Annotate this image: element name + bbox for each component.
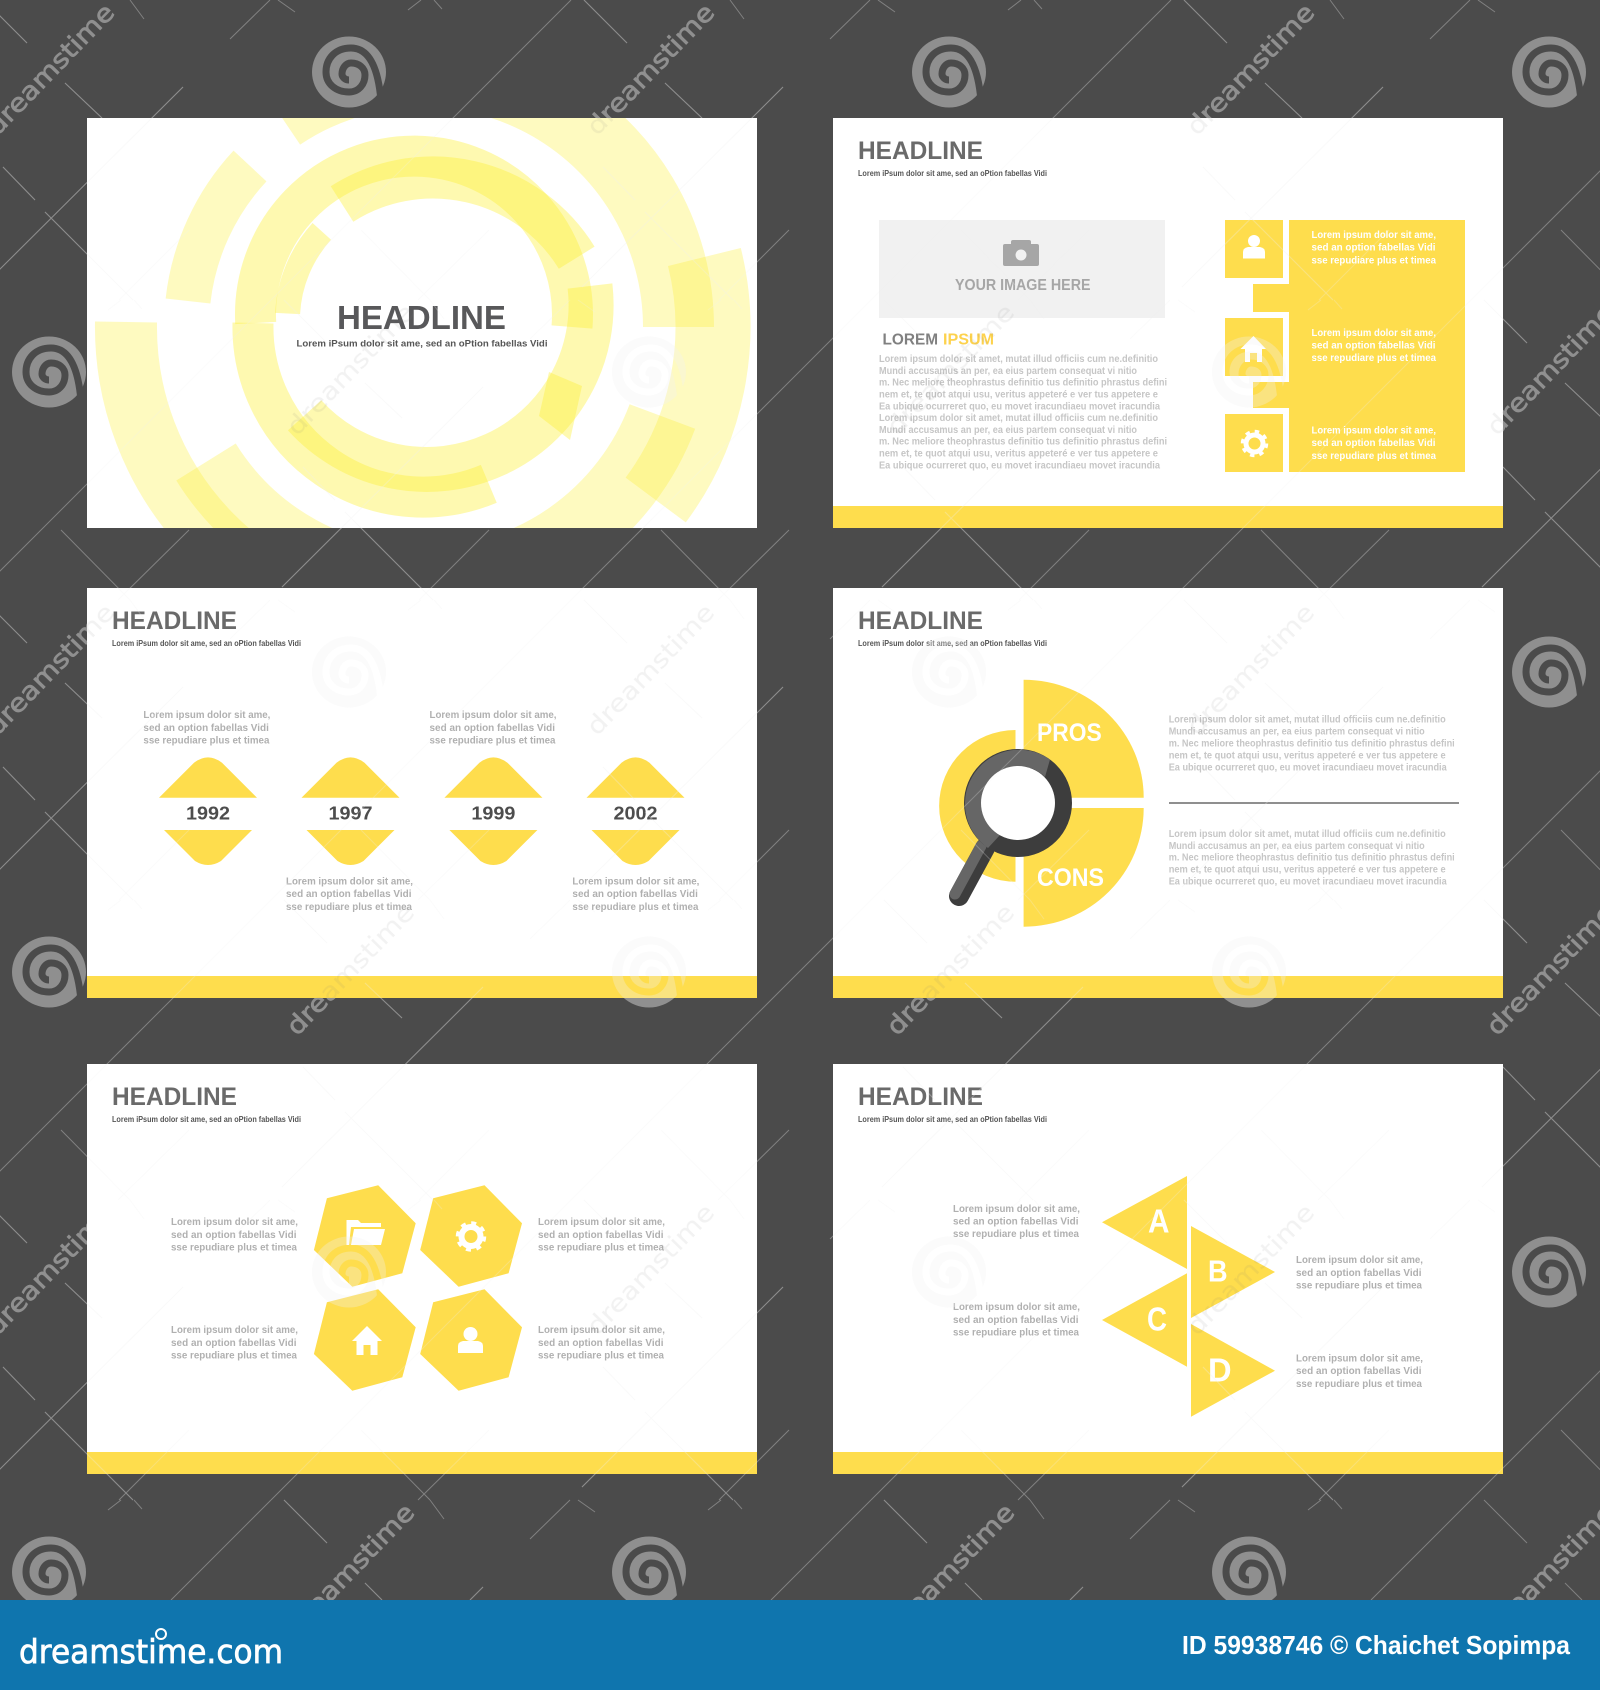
callout text 3: sse repudiare plus et timea [1312,450,1436,462]
text: top right: Lorem ipsum dolor sit ame, [538,1216,665,1228]
text: 1997: sse repudiare plus et timea [286,901,412,913]
watermark overlay on panels: dreamstime [1181,0,1320,141]
footer logo: dreamstime.com [19,1632,283,1671]
text: top left: Lorem ipsum dolor sit ame, [171,1216,298,1228]
text: bottom right: Lorem ipsum dolor sit ame, [538,1324,665,1336]
text: A: Lorem ipsum dolor sit ame, [953,1203,1080,1215]
text: top left: sse repudiare plus et timea [171,1241,297,1253]
label: cons: CONS [1037,864,1104,892]
watermark overlay on panels: dreamstime [881,298,1020,441]
icon: camera [1003,240,1039,266]
pros text [1169,714,1455,774]
text: D [1296,1352,1423,1390]
text: 1999: sse repudiare plus et timea [430,735,556,747]
background watermark pattern: dreamstime [581,0,720,141]
text: C: sed an option fabellas Vidi [953,1314,1079,1326]
pros text: Lorem ipsum dolor sit amet, mutat illud officiis cum ne.definitio [1169,714,1446,726]
pros text: Mundi accusamus an per, ea eius partem consequat vi nitio [1169,726,1425,738]
subheading: Lorem iPsum dolor sit ame, sed an oPtion fabellas Vidi [858,638,1047,648]
title subheading: Lorem iPsum dolor sit ame, sed an oPtion fabellas Vidi [296,338,548,350]
subheading: Lorem iPsum dolor sit ame, sed an oPtion fabellas Vidi [858,1114,1047,1124]
text: bottom left: sed an option fabellas Vidi [171,1337,297,1349]
text: D: sse repudiare plus et timea [1296,1378,1422,1390]
body text: Ea ubique ocurreret quo, eu movet iracundiaeu movet iracundia [879,401,1160,412]
headline: HEADLINE [858,607,983,635]
subheading: lorem ipsum [882,332,994,348]
yellow text column [1253,220,1465,472]
triangle B [1191,1226,1275,1318]
text: 1997 [286,876,413,913]
watermark overlay on panels [87,118,1503,1474]
icon box: gear [1225,414,1283,472]
placeholder label: YOUR IMAGE HERE [955,277,1091,294]
subheading: lorem ipsum: IPSUM [943,332,994,348]
triangle C [1102,1273,1187,1367]
icon box: house [1225,318,1283,376]
divider line [1169,802,1459,804]
body text: m. Nec meliore theophrastus definitio tus definitio phrastus defini [879,437,1167,448]
watermark overlay on panels: dreamstime [581,598,720,741]
text: 1997: Lorem ipsum dolor sit ame, [286,876,413,888]
callout text 1: sse repudiare plus et timea [1312,254,1436,266]
chart: overlapping yellow ring segments [95,118,750,528]
background watermark pattern: dreamstime [281,898,420,1041]
pros text: Ea ubique ocurreret quo, eu movet iracundiaeu movet iracundia [1169,762,1447,774]
triangle A [1102,1176,1187,1269]
watermark overlay on panels: dreamstime [581,0,720,141]
text: D: Lorem ipsum dolor sit ame, [1296,1352,1423,1364]
footer bar [833,1452,1503,1474]
text: top right [538,1216,665,1254]
cons text: nem et, te quot atqui usu, veritus appeteré e ver tus appetere e [1169,864,1446,875]
subheading: Lorem iPsum dolor sit ame, sed an oPtion fabellas Vidi [858,168,1047,178]
text: 1997: sed an option fabellas Vidi [286,888,412,900]
footer band [0,1600,1600,1690]
callout text 1 [1312,229,1436,266]
left half circle [939,730,1016,882]
cons text: m. Nec meliore theophrastus definitio tus definitio phrastus defini [1169,852,1455,864]
subheading: Lorem iPsum dolor sit ame, sed an oPtion fabellas Vidi [112,638,301,648]
marker: 1999 [444,757,542,865]
marker: 1997 [302,757,400,865]
callout text 3: Lorem ipsum dolor sit ame, [1312,424,1436,436]
icon: magnifying glass [955,749,1072,896]
body text: Mundi accusamus an per, ea eius partem consequat vi nitio [879,366,1137,377]
triangle D: D [1208,1352,1232,1389]
cons text [1169,829,1455,887]
text: D: sed an option fabellas Vidi [1296,1365,1422,1377]
subheading: lorem ipsum: LOREM [882,332,938,348]
text: bottom right: sse repudiare plus et timea [538,1349,664,1361]
body text: Lorem ipsum dolor sit amet, mutat illud officiis cum ne.definitio [879,413,1158,424]
panel: timeline [87,588,757,998]
text: C: sse repudiare plus et timea [953,1326,1079,1338]
cons text: Lorem ipsum dolor sit amet, mutat illud officiis cum ne.definitio [1169,829,1446,840]
text: bottom left [171,1324,298,1362]
text: top right: sed an option fabellas Vidi [538,1229,664,1241]
text: B [1296,1254,1423,1292]
callout text 2: sse repudiare plus et timea [1312,352,1436,364]
body text [879,354,1167,471]
body text: Mundi accusamus an per, ea eius partem consequat vi nitio [879,425,1137,436]
footer bar [87,1452,757,1474]
hexagon: folder [314,1185,416,1287]
marker: 1992: 1992 [186,802,230,824]
callout text 3 [1312,424,1436,462]
cons text: Mundi accusamus an per, ea eius partem consequat vi nitio [1169,841,1425,852]
cons quarter circle [1024,808,1144,927]
callout text 1: Lorem ipsum dolor sit ame, [1312,229,1436,241]
footer credit: ID 59938746 © Chaichet Sopimpa [1182,1630,1571,1660]
text: 1999 [430,709,557,746]
footer bar [833,976,1503,998]
text: A: sed an option fabellas Vidi [953,1216,1079,1228]
text: 1999: Lorem ipsum dolor sit ame, [430,709,557,721]
watermark overlay on panels: dreamstime [1181,1198,1320,1341]
callout text 1: sed an option fabellas Vidi [1312,242,1436,254]
footer bar [833,506,1503,528]
marker: 1992 [159,757,257,865]
text: 1992 [143,709,270,746]
text: bottom left: Lorem ipsum dolor sit ame, [171,1324,298,1336]
subheading: Lorem iPsum dolor sit ame, sed an oPtion fabellas Vidi [112,1114,301,1124]
text: 2002: sse repudiare plus et timea [572,901,699,913]
cons text: Ea ubique ocurreret quo, eu movet iracundiaeu movet iracundia [1169,876,1447,887]
body text: Ea ubique ocurreret quo, eu movet iracundiaeu movet iracundia [879,460,1160,471]
headline: HEADLINE [112,607,237,635]
marker: 2002 [586,757,684,865]
body text: nem et, te quot atqui usu, veritus appeteré e ver tus appetere e [879,449,1158,460]
panel: title slide with rings [87,118,757,528]
panel: triangles [833,1064,1503,1474]
watermark overlay on panels: dreamstime [881,898,1020,1041]
marker: 2002: 2002 [614,802,658,824]
text: top left [171,1216,298,1254]
triangle B: B [1208,1254,1228,1289]
watermark overlay on panels: dreamstime [281,298,420,441]
body text: nem et, te quot atqui usu, veritus appeteré e ver tus appetere e [879,390,1158,401]
image placeholder [879,220,1165,318]
hexagon: house [314,1289,416,1391]
text: 2002: Lorem ipsum dolor sit ame, [572,876,699,888]
text: 1992: Lorem ipsum dolor sit ame, [143,709,270,721]
headline: HEADLINE [112,1083,237,1111]
text: 1992: sed an option fabellas Vidi [143,722,269,734]
text: C: Lorem ipsum dolor sit ame, [953,1301,1080,1313]
headline: HEADLINE [858,1083,983,1111]
triangle C: C [1147,1301,1167,1338]
background watermark pattern: dreamstime [881,898,1020,1041]
pros text: m. Nec meliore theophrastus definitio tus definitio phrastus defini [1169,738,1455,750]
text: 2002: sed an option fabellas Vidi [572,888,698,900]
text: 2002 [572,876,699,913]
background watermark pattern: dreamstime [281,1498,420,1641]
panel: image and icon list [833,118,1503,528]
marker: 1997: 1997 [328,802,372,824]
background watermark pattern: dreamstime [881,1498,1020,1641]
text: top right: sse repudiare plus et timea [538,1241,664,1253]
text: A: sse repudiare plus et timea [953,1228,1079,1240]
watermark overlay on panels: dreamstime [1181,598,1320,741]
text: B: sed an option fabellas Vidi [1296,1267,1422,1279]
callout text 3: sed an option fabellas Vidi [1312,437,1436,449]
title headline: HEADLINE [337,299,506,336]
callout text 2: sed an option fabellas Vidi [1312,339,1436,351]
body text: Lorem ipsum dolor sit amet, mutat illud officiis cum ne.definitio [879,354,1158,365]
hexagon: person [420,1289,522,1391]
headline: HEADLINE [858,137,983,165]
pros quarter circle [1024,680,1144,798]
text: C [953,1301,1080,1338]
text: A [953,1203,1080,1240]
marker: 1999: 1999 [471,802,515,824]
text: 1999: sed an option fabellas Vidi [430,722,555,734]
text: B: sse repudiare plus et timea [1296,1279,1422,1291]
watermark overlay on panels: dreamstime [281,898,420,1041]
text: bottom right: sed an option fabellas Vidi [538,1337,664,1349]
text: B: Lorem ipsum dolor sit ame, [1296,1254,1423,1266]
text: bottom left: sse repudiare plus et timea [171,1349,297,1361]
callout text 2: Lorem ipsum dolor sit ame, [1312,327,1436,339]
panel: hexagons [87,1064,757,1474]
callout text 2 [1312,327,1436,364]
triangle D [1191,1324,1275,1417]
watermark overlay on panels: dreamstime [581,1198,720,1341]
panel: pros and cons [833,588,1503,998]
body text: m. Nec meliore theophrastus definitio tus definitio phrastus defini [879,378,1167,389]
triangle A: A [1148,1203,1170,1240]
text: bottom right [538,1324,665,1362]
pros text: nem et, te quot atqui usu, veritus appeteré e ver tus appetere e [1169,750,1446,762]
footer bar [87,976,757,998]
background watermark pattern: dreamstime [1181,0,1320,141]
hexagon: gear [420,1185,522,1287]
label: pros: PROS [1037,719,1102,747]
icon box: person [1225,220,1283,278]
text: top left: sed an option fabellas Vidi [171,1229,297,1241]
text: 1992: sse repudiare plus et timea [143,735,270,747]
